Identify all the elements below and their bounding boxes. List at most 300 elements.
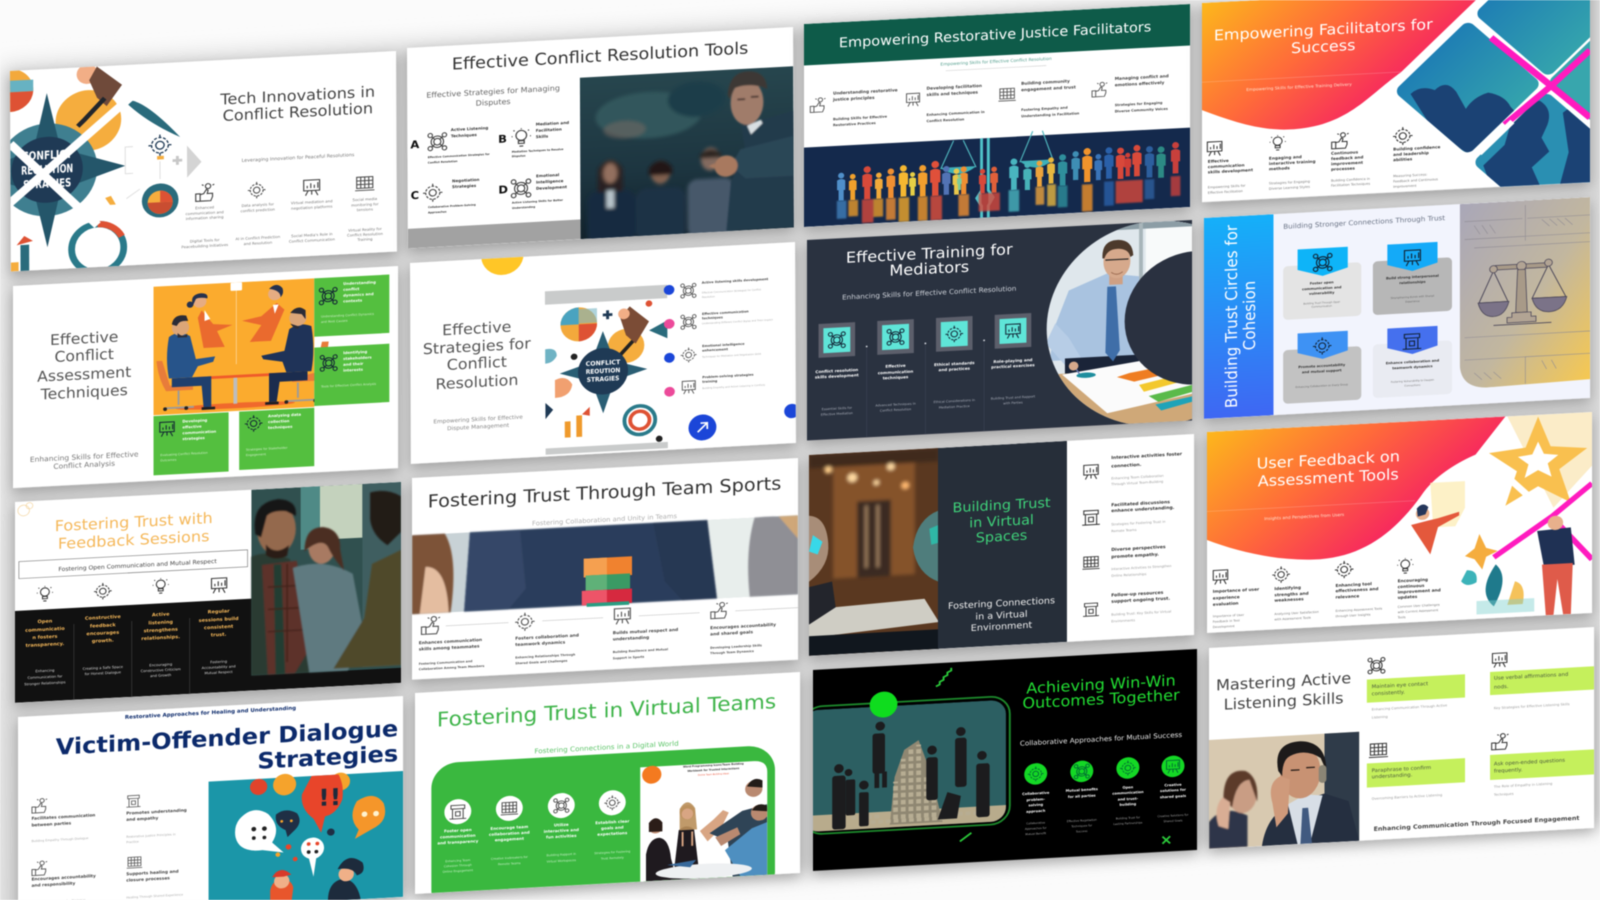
column 1: Cohesion Through bbox=[444, 863, 472, 868]
item 4: support ongoing trust. bbox=[1111, 596, 1170, 605]
feature labels: Digital Tools for bbox=[190, 238, 220, 244]
card 4: Enhance collaboration and bbox=[1386, 359, 1440, 365]
column 2: Remote Teams bbox=[498, 861, 521, 866]
arrow button bbox=[688, 414, 716, 441]
item 4: Developing Leadership Skills bbox=[710, 643, 762, 650]
green card 4: Engagement bbox=[246, 452, 267, 457]
illustration: compass poster: STRAGIES bbox=[587, 374, 620, 384]
item 4: frequently. bbox=[1494, 767, 1523, 775]
feature labels: monitoring for bbox=[351, 202, 379, 208]
heading: Effective bbox=[442, 318, 511, 339]
item 2: Restorative Justice Principles in bbox=[126, 832, 176, 839]
column 1: approach bbox=[1026, 809, 1046, 814]
illustration: meeting at a table bbox=[154, 278, 329, 415]
item 2: Analyzing User Satisfaction bbox=[1274, 610, 1319, 616]
column 1: Effective Mediation bbox=[821, 411, 853, 417]
column 1: Online Engagement bbox=[443, 868, 474, 874]
card 1: Building Trust Through Open bbox=[1303, 300, 1341, 306]
gradient wave bbox=[1202, 0, 1488, 134]
heading: Tech Innovations in bbox=[219, 83, 375, 109]
dark title panel: Environment bbox=[971, 620, 1033, 634]
illustration: compass mosaic: REOLUTION bbox=[21, 161, 73, 178]
photo frame: builders bbox=[803, 696, 1010, 836]
item 1: justice principles bbox=[832, 95, 875, 102]
dark title panel bbox=[938, 441, 1067, 649]
dark title panel: in a Virtual bbox=[975, 609, 1028, 622]
subtitle: Insights and Perspectives from Users bbox=[1264, 512, 1344, 521]
item D: Emotional bbox=[536, 172, 560, 178]
column 4: Creative Solutions for bbox=[1158, 813, 1189, 818]
heading: Resolution bbox=[435, 371, 518, 393]
column 2: Conflict Resolution bbox=[880, 407, 911, 413]
column 4: expectations bbox=[597, 830, 628, 837]
circular photo: mediator with chart bbox=[1038, 211, 1202, 437]
black band bbox=[15, 591, 401, 703]
item 4: Diverse Community Voices bbox=[1115, 107, 1168, 113]
green card 4: techniques bbox=[268, 424, 293, 430]
column 1: transparency. bbox=[25, 641, 65, 649]
diamond photos: silhouettes bbox=[1396, 0, 1591, 188]
dark title panel: in Virtual bbox=[969, 512, 1034, 531]
item 1: Enhances communication bbox=[419, 637, 482, 646]
column 1: communication bbox=[440, 833, 476, 839]
column 1: Foster open bbox=[444, 827, 472, 833]
item 4: Ask open-ended questions bbox=[1494, 758, 1565, 767]
item 1 bbox=[1207, 140, 1253, 195]
heading: Effective Training for bbox=[846, 241, 1013, 267]
item 3: processes bbox=[1331, 166, 1356, 172]
column 3: Mediation Practice bbox=[939, 404, 970, 410]
column 3: Constructive Criticism bbox=[141, 667, 181, 673]
item A: Active Listening bbox=[451, 125, 489, 132]
column 4: Creative bbox=[1164, 783, 1182, 787]
item D bbox=[498, 172, 567, 211]
item 3: Continuous bbox=[1331, 150, 1359, 156]
item 4: emotions effectively bbox=[1115, 80, 1165, 87]
subtitle bbox=[30, 451, 139, 470]
item B: Facilitation bbox=[536, 127, 562, 133]
item 3 bbox=[664, 341, 762, 364]
item 1: Facilitates communication bbox=[31, 813, 95, 821]
heading bbox=[846, 241, 1013, 282]
item 4: abilities bbox=[1393, 156, 1413, 162]
column 4: solutions for bbox=[1160, 788, 1186, 793]
column 3: relationships. bbox=[141, 634, 180, 642]
item 4: Through Team Dynamics bbox=[710, 649, 754, 655]
feature labels: and Resolution bbox=[244, 241, 273, 246]
item B: Mediation and bbox=[536, 120, 569, 127]
column 3: Active bbox=[152, 612, 170, 618]
item 3: Emotional intelligence bbox=[702, 342, 745, 348]
column dividers bbox=[74, 618, 190, 700]
item 4: Building confidence bbox=[1393, 144, 1441, 152]
heading bbox=[1257, 448, 1400, 490]
item 2 bbox=[126, 793, 187, 844]
vertical heading bbox=[1221, 223, 1259, 409]
column 3: and trust- bbox=[1118, 797, 1139, 802]
item 3: Diverse perspectives bbox=[1111, 544, 1166, 553]
green card 3: communication bbox=[182, 429, 217, 435]
green card 4 bbox=[239, 408, 314, 470]
heading: Assessment bbox=[37, 363, 131, 386]
item B: B bbox=[498, 133, 507, 146]
illustration: compass poster: REOUTION bbox=[586, 366, 620, 376]
item 3: engagement and trust bbox=[1021, 85, 1076, 92]
item C: C bbox=[411, 189, 419, 202]
column 1: skills development bbox=[815, 372, 859, 380]
feature labels: Social media bbox=[353, 197, 377, 202]
subtitle: Empowering Skills for Effective Training Delivery bbox=[1246, 82, 1352, 92]
decorative blue circle bbox=[784, 403, 800, 419]
item B bbox=[498, 120, 569, 159]
item 4: continuous bbox=[1398, 583, 1425, 589]
column 2: growth. bbox=[92, 638, 114, 645]
item 2: weaknesses bbox=[1274, 596, 1304, 603]
column 1: Approaches for bbox=[1025, 826, 1047, 831]
green card 3: effective bbox=[182, 424, 202, 429]
heading: Mastering Active bbox=[1216, 670, 1351, 694]
column 4: shared goals bbox=[1160, 794, 1186, 799]
item 2: teamwork dynamics bbox=[515, 640, 566, 648]
item 4: with Current Assessment bbox=[1398, 608, 1439, 614]
slide: Effective Conflict Resolution Tools bbox=[407, 27, 794, 255]
item 2: nods. bbox=[1494, 684, 1509, 691]
column 1: communicatio bbox=[25, 626, 65, 634]
feature labels: Social Media's Role in bbox=[291, 232, 333, 238]
green card 3: Developing bbox=[182, 418, 208, 424]
illustration: compass poster bbox=[545, 285, 668, 455]
item 3: feedback and bbox=[1331, 155, 1363, 161]
column 4: with Parties bbox=[1003, 401, 1023, 405]
item 1: Effective bbox=[1208, 158, 1229, 164]
green card 1: Understanding Conflict Dynamics bbox=[321, 312, 374, 319]
green card 1 bbox=[314, 275, 389, 337]
column 3: building bbox=[1120, 802, 1137, 807]
item 2: skills and techniques bbox=[927, 90, 979, 97]
illustration: compass poster: CONFLICT bbox=[586, 358, 621, 368]
item 1: Interactive activities foster bbox=[1111, 451, 1183, 461]
column 3: communication bbox=[1112, 790, 1144, 796]
item 2: Key Strategies for Effective Listening Skills bbox=[1494, 702, 1570, 710]
column dividers bbox=[866, 339, 985, 437]
column 4: Trust Remotely bbox=[600, 856, 624, 861]
column 3: strengthens bbox=[144, 627, 178, 634]
item 2: Promotes understanding bbox=[126, 808, 187, 816]
subtitle bbox=[426, 85, 560, 108]
card 3 bbox=[1283, 330, 1361, 404]
item 3: promote empathy. bbox=[1111, 552, 1159, 560]
item 1: skills development bbox=[1208, 167, 1253, 174]
column 1: Collaborative bbox=[1022, 791, 1050, 796]
item 3: Enhancing tool bbox=[1335, 581, 1372, 588]
item 4: Managing conflict and bbox=[1115, 73, 1169, 81]
subtitle: Leveraging Innovation for Peaceful Resolutions bbox=[242, 152, 355, 164]
card 3: Promote accountability bbox=[1298, 363, 1346, 369]
item 4: Measuring Success: bbox=[1393, 173, 1427, 178]
item 3: Facilitation Techniques bbox=[1331, 182, 1370, 188]
item A bbox=[410, 125, 490, 166]
column 4: practical exercises bbox=[991, 362, 1035, 369]
heading bbox=[423, 317, 532, 394]
column 2 bbox=[1066, 760, 1098, 834]
column 4: Shared Goals bbox=[1164, 818, 1183, 823]
item 2: Fosters collaboration and bbox=[515, 633, 579, 642]
item 3: Encourages accountability bbox=[31, 873, 96, 882]
feature labels: Training bbox=[356, 237, 373, 242]
slide: Empowering Facilitators for Success bbox=[1195, 0, 1597, 212]
column 2: collaboration and bbox=[489, 830, 530, 837]
item 2: with Assessment Tools bbox=[1274, 616, 1311, 621]
heading: Achieving Win-Win bbox=[1026, 672, 1176, 697]
item D: Active Listening Skills for Better bbox=[512, 198, 564, 205]
column 2: Effective bbox=[885, 363, 906, 369]
column 2: Creative Icebreakers for bbox=[491, 855, 529, 861]
kicker: Restorative Approaches for Healing and Understanding bbox=[125, 706, 296, 721]
item 2 bbox=[1269, 133, 1316, 191]
card 2: relationships bbox=[1399, 280, 1426, 285]
column 4: sessions build bbox=[199, 616, 239, 624]
column 3: Ethical standards bbox=[934, 360, 975, 367]
item 1: Resolution bbox=[702, 295, 715, 299]
item 1 bbox=[31, 796, 95, 843]
item D: Intelligence bbox=[536, 178, 564, 185]
header band bbox=[804, 4, 1190, 65]
item 3: Builds mutual respect and bbox=[613, 627, 678, 636]
column 4: consistent bbox=[204, 624, 234, 631]
green panel bbox=[431, 745, 775, 900]
feature labels: Conflict Communication bbox=[289, 238, 336, 244]
column 1 bbox=[815, 322, 859, 417]
column 2: for Honest Dialogue bbox=[85, 670, 121, 676]
column 4: Fostering bbox=[210, 660, 227, 664]
subtitle: Effective Strategies for Managing bbox=[426, 84, 560, 100]
green card 4: Strategies for Stakeholder bbox=[246, 446, 288, 452]
item 1: between parties bbox=[31, 821, 72, 828]
item 1: skills among teammates bbox=[419, 644, 480, 653]
item 2: interactive training bbox=[1269, 159, 1316, 166]
card 4 bbox=[1373, 325, 1452, 398]
column 4: Accountability and bbox=[202, 665, 236, 670]
card 1 bbox=[1283, 246, 1361, 320]
slide: Victim-Offender Dialogue Strategies bbox=[18, 696, 403, 900]
item 2: Remote Teams bbox=[1111, 528, 1137, 533]
illustration: compass mosaic bbox=[9, 66, 202, 272]
green card 2: stakeholders bbox=[343, 355, 372, 361]
subtitle: Conflict Analysis bbox=[53, 459, 115, 471]
feature labels bbox=[181, 197, 384, 251]
illustration: speech bubbles: !! bbox=[318, 784, 341, 812]
item 4: Supports healing and bbox=[126, 869, 179, 876]
slide: Mastering Active Listening Skills bbox=[1209, 627, 1594, 849]
item 2 bbox=[1272, 564, 1319, 622]
item 2: Shared Goals and Challenges bbox=[515, 659, 568, 665]
feature labels: Virtual mediation and bbox=[291, 199, 333, 205]
column 1: Enhancing Team bbox=[445, 858, 471, 863]
photo panel: team high five bbox=[640, 759, 768, 882]
column 4: Building Trust and Rapport bbox=[991, 395, 1036, 401]
item 3 bbox=[1335, 559, 1383, 618]
illustration: star and people bbox=[1411, 412, 1592, 622]
column 4: Establish clear bbox=[595, 819, 629, 825]
item 1 bbox=[810, 87, 898, 128]
feature labels: tensions bbox=[357, 208, 373, 212]
item 3 bbox=[1331, 131, 1370, 188]
heading: User Feedback on bbox=[1257, 448, 1400, 473]
heading bbox=[220, 85, 374, 122]
column 3: Building Trust for bbox=[1116, 815, 1141, 821]
item 4: Encouraging bbox=[1398, 577, 1428, 583]
slide: Effective Strategies for Conflict Resolution bbox=[410, 219, 800, 464]
item 4 bbox=[710, 599, 798, 655]
item 4 bbox=[1393, 125, 1441, 189]
green card 1: and Root Causes bbox=[321, 319, 348, 324]
heading: Fostering Trust with bbox=[55, 510, 213, 535]
column 4 bbox=[199, 608, 239, 676]
slide: Effective Conflict Assessment Techniques bbox=[13, 266, 398, 488]
item 2 bbox=[664, 308, 773, 330]
accent circle bbox=[870, 691, 897, 718]
item 3: Enhancing Assessment Tools bbox=[1335, 607, 1383, 613]
column 1 bbox=[24, 618, 66, 686]
slide: Fostering Trust Through Team Sports bbox=[412, 458, 798, 680]
item 3: and responsibility bbox=[31, 881, 76, 888]
item 3 bbox=[1082, 544, 1172, 579]
subtitle bbox=[433, 415, 523, 433]
item 2 bbox=[907, 83, 985, 124]
card 3: and mutual support bbox=[1302, 368, 1342, 374]
item 4 bbox=[664, 372, 766, 397]
item 4: Strategies for Engaging bbox=[1115, 101, 1163, 107]
item 3: through User Insights bbox=[1335, 613, 1371, 618]
item 2: Practice bbox=[126, 840, 139, 844]
card 3: Enhancing Collaboration as Every Group bbox=[1296, 382, 1348, 389]
item 4: Feedback and Continuous bbox=[1393, 177, 1438, 183]
item 1: Building Empathy Through Dialogue bbox=[31, 836, 89, 843]
heading: Mediators bbox=[889, 258, 969, 280]
card 1: communication and bbox=[1302, 285, 1342, 291]
item 2: Strategies for Engaging bbox=[1269, 180, 1310, 185]
heading: Techniques bbox=[40, 381, 128, 403]
feature labels: information sharing bbox=[186, 215, 224, 221]
footer line: Enhancing Communication Through Focused Engagement bbox=[1374, 815, 1579, 833]
item 1: Collaboration Among Team Members bbox=[419, 664, 485, 671]
heading: Conflict bbox=[447, 353, 507, 374]
photo panel: team high five: Workbook for Trusted Interactions bbox=[687, 766, 740, 773]
heading bbox=[1022, 672, 1180, 712]
item 3 bbox=[31, 858, 96, 900]
item A: A bbox=[410, 138, 420, 151]
item 2: methods bbox=[1269, 165, 1290, 171]
item 2 bbox=[515, 609, 603, 665]
dark circle overlay bbox=[1125, 247, 1269, 388]
vertical heading: Cohesion bbox=[1240, 280, 1259, 351]
photo: stacking blocks bbox=[412, 515, 798, 616]
column 1: Open bbox=[38, 619, 53, 625]
item 1: Importance of user bbox=[1213, 587, 1260, 594]
slide: Building Trust Circles for Cohesion bbox=[1204, 197, 1590, 419]
item 4: Follow-up resources bbox=[1111, 590, 1164, 598]
card 4: teamwork dynamics bbox=[1392, 364, 1433, 370]
item 3: Building Resilience and Mutual bbox=[613, 647, 668, 654]
slide: Empowering Restorative Justice Facilitators bbox=[804, 4, 1190, 227]
item 4: Environments bbox=[1111, 618, 1135, 623]
item 1: Maintain eye contact bbox=[1372, 681, 1428, 690]
green card 1: dynamics and bbox=[343, 291, 374, 298]
column 2: Constructive bbox=[85, 614, 121, 622]
subtitle: Disputes bbox=[476, 97, 511, 108]
item D: D bbox=[498, 184, 508, 197]
item 3: Techniques for Mediation and Negotiation Skills bbox=[702, 353, 762, 359]
item 3: Paraphrase to confirm bbox=[1372, 765, 1431, 774]
column 2: Creating a Safe Space bbox=[83, 665, 123, 671]
heading: Effective bbox=[50, 328, 118, 349]
green card 2: Identifying bbox=[343, 349, 368, 355]
item 1: communication bbox=[1208, 162, 1245, 169]
column 3 bbox=[934, 316, 975, 410]
item 1: Feedback in Tool bbox=[1213, 619, 1240, 624]
column 1 bbox=[1022, 762, 1050, 836]
column 4: Strategies for Fostering bbox=[594, 849, 631, 855]
item A: Effective Communication Strategies for bbox=[428, 152, 490, 159]
item 2: techniques bbox=[702, 315, 723, 320]
item 3 bbox=[613, 604, 700, 660]
feature labels: communication and bbox=[186, 210, 224, 216]
item 4: closure processes bbox=[126, 875, 170, 883]
heading: Strategies for bbox=[423, 335, 532, 358]
heading: Victim-Offender Dialogue bbox=[56, 716, 398, 761]
item 4: improvement and bbox=[1398, 587, 1441, 595]
item 2: Facilitated discussions bbox=[1111, 499, 1170, 508]
icon row bbox=[37, 575, 227, 603]
item 4: Techniques bbox=[1493, 792, 1514, 797]
column 2: Techniques for bbox=[1070, 823, 1093, 828]
item C: Negotiation bbox=[452, 177, 480, 183]
item 2: strengths and bbox=[1274, 591, 1309, 597]
green card 3 bbox=[154, 412, 229, 475]
heading: Fostering Trust Through Team Sports bbox=[428, 474, 781, 512]
column 4 bbox=[991, 313, 1036, 406]
column 3: Utilize bbox=[554, 822, 569, 827]
item 1: experience bbox=[1213, 594, 1240, 601]
column 1: Communication for bbox=[27, 674, 63, 680]
subtitle bbox=[1207, 501, 1415, 524]
item 2 bbox=[1082, 499, 1175, 535]
heading: Feedback Sessions bbox=[58, 528, 209, 553]
column 2: Encourage team bbox=[490, 824, 528, 831]
column 1: Stronger Relationships bbox=[24, 680, 66, 686]
item 1: connection. bbox=[1111, 462, 1142, 469]
item 1: evaluation bbox=[1213, 601, 1239, 607]
item 3 bbox=[998, 78, 1080, 120]
item 4 bbox=[1083, 589, 1171, 625]
green card 2: and their bbox=[343, 361, 363, 367]
item C: Approaches bbox=[428, 210, 447, 214]
item 3: Support in Sports bbox=[613, 655, 645, 660]
card 2: Strengthening Bonds with Shared bbox=[1391, 294, 1435, 300]
item 2: Effective communication bbox=[702, 309, 749, 316]
column 1: Enhancing bbox=[35, 669, 54, 673]
item D: Understanding bbox=[512, 205, 535, 210]
item B: Mediation Techniques to Resolve bbox=[512, 147, 564, 154]
item 2: Conflict Resolution bbox=[927, 117, 965, 123]
column 3: fun activities bbox=[546, 833, 577, 840]
item 4: Encourages accountability bbox=[710, 622, 776, 631]
item 4: Problem-solving strategies bbox=[702, 373, 754, 379]
heading: Conflict Resolution bbox=[223, 100, 373, 125]
item 1: Listening bbox=[1372, 715, 1388, 720]
decorative circles bbox=[18, 502, 33, 516]
photo: group conversation bbox=[251, 482, 401, 675]
